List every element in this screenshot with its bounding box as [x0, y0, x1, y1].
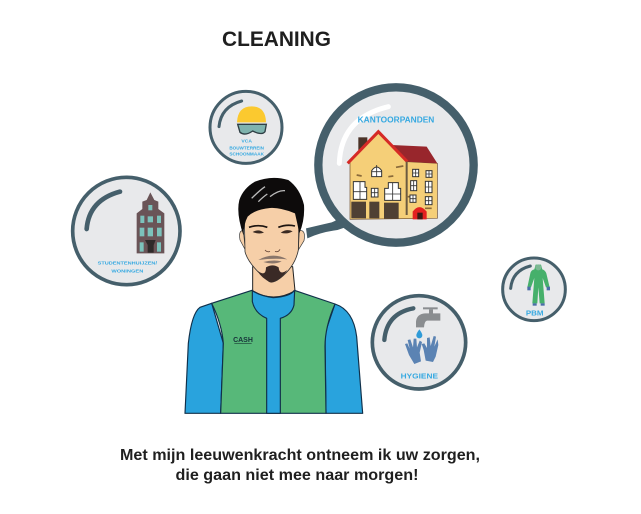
panel: studentenhuizen	[73, 177, 180, 285]
panel: vca bouwterrein schoonmaak	[210, 91, 282, 163]
title: CLEANING	[222, 28, 331, 51]
label: vca: BOUWTERREIN	[229, 145, 264, 151]
panel: hygiene	[372, 296, 466, 389]
highlight	[87, 192, 120, 229]
icon: hard hat and goggles	[237, 106, 266, 134]
vest logo: CASH	[233, 337, 253, 344]
shirt collar and placket	[252, 290, 295, 413]
moustache and mouth	[258, 256, 287, 264]
man illustration	[185, 178, 363, 413]
icon: water drop	[416, 329, 422, 338]
label: hygiene: HYGIENE	[401, 374, 438, 381]
label: vca: SCHOONMAAK	[229, 152, 264, 158]
slogan: die gaan niet mee naar morgen!	[176, 467, 418, 484]
hair	[238, 178, 304, 235]
nose	[265, 249, 280, 252]
label: pbm: PBM	[526, 308, 543, 317]
label: studentenhuizen: STUDENTENHUIJZEN/	[98, 261, 158, 267]
sleeves	[185, 303, 363, 413]
goatee	[257, 265, 287, 283]
slogan: Met mijn leeuwenkracht ontneem ik uw zorgen,	[120, 447, 480, 464]
eyebrows and eyes	[249, 225, 295, 227]
vest	[212, 290, 335, 413]
face	[244, 200, 299, 282]
icon: gloves	[405, 336, 438, 364]
highlight	[511, 266, 530, 288]
panel: pbm	[503, 258, 565, 321]
label: kantoorpanden: KANTOORPANDEN	[358, 116, 435, 125]
neck	[253, 267, 295, 297]
icon: canal house	[137, 192, 164, 253]
panel: kantoorpanden speech bubble	[306, 87, 474, 243]
highlight	[339, 107, 388, 163]
ears	[240, 231, 304, 250]
icon: tap	[416, 307, 440, 327]
label: vca: VCA	[241, 139, 252, 145]
highlight	[219, 101, 242, 127]
highlight	[384, 308, 413, 340]
icon: protective suit	[527, 264, 550, 306]
icon: office building	[348, 132, 437, 219]
label: studentenhuizen: WONINGEN	[111, 269, 144, 275]
